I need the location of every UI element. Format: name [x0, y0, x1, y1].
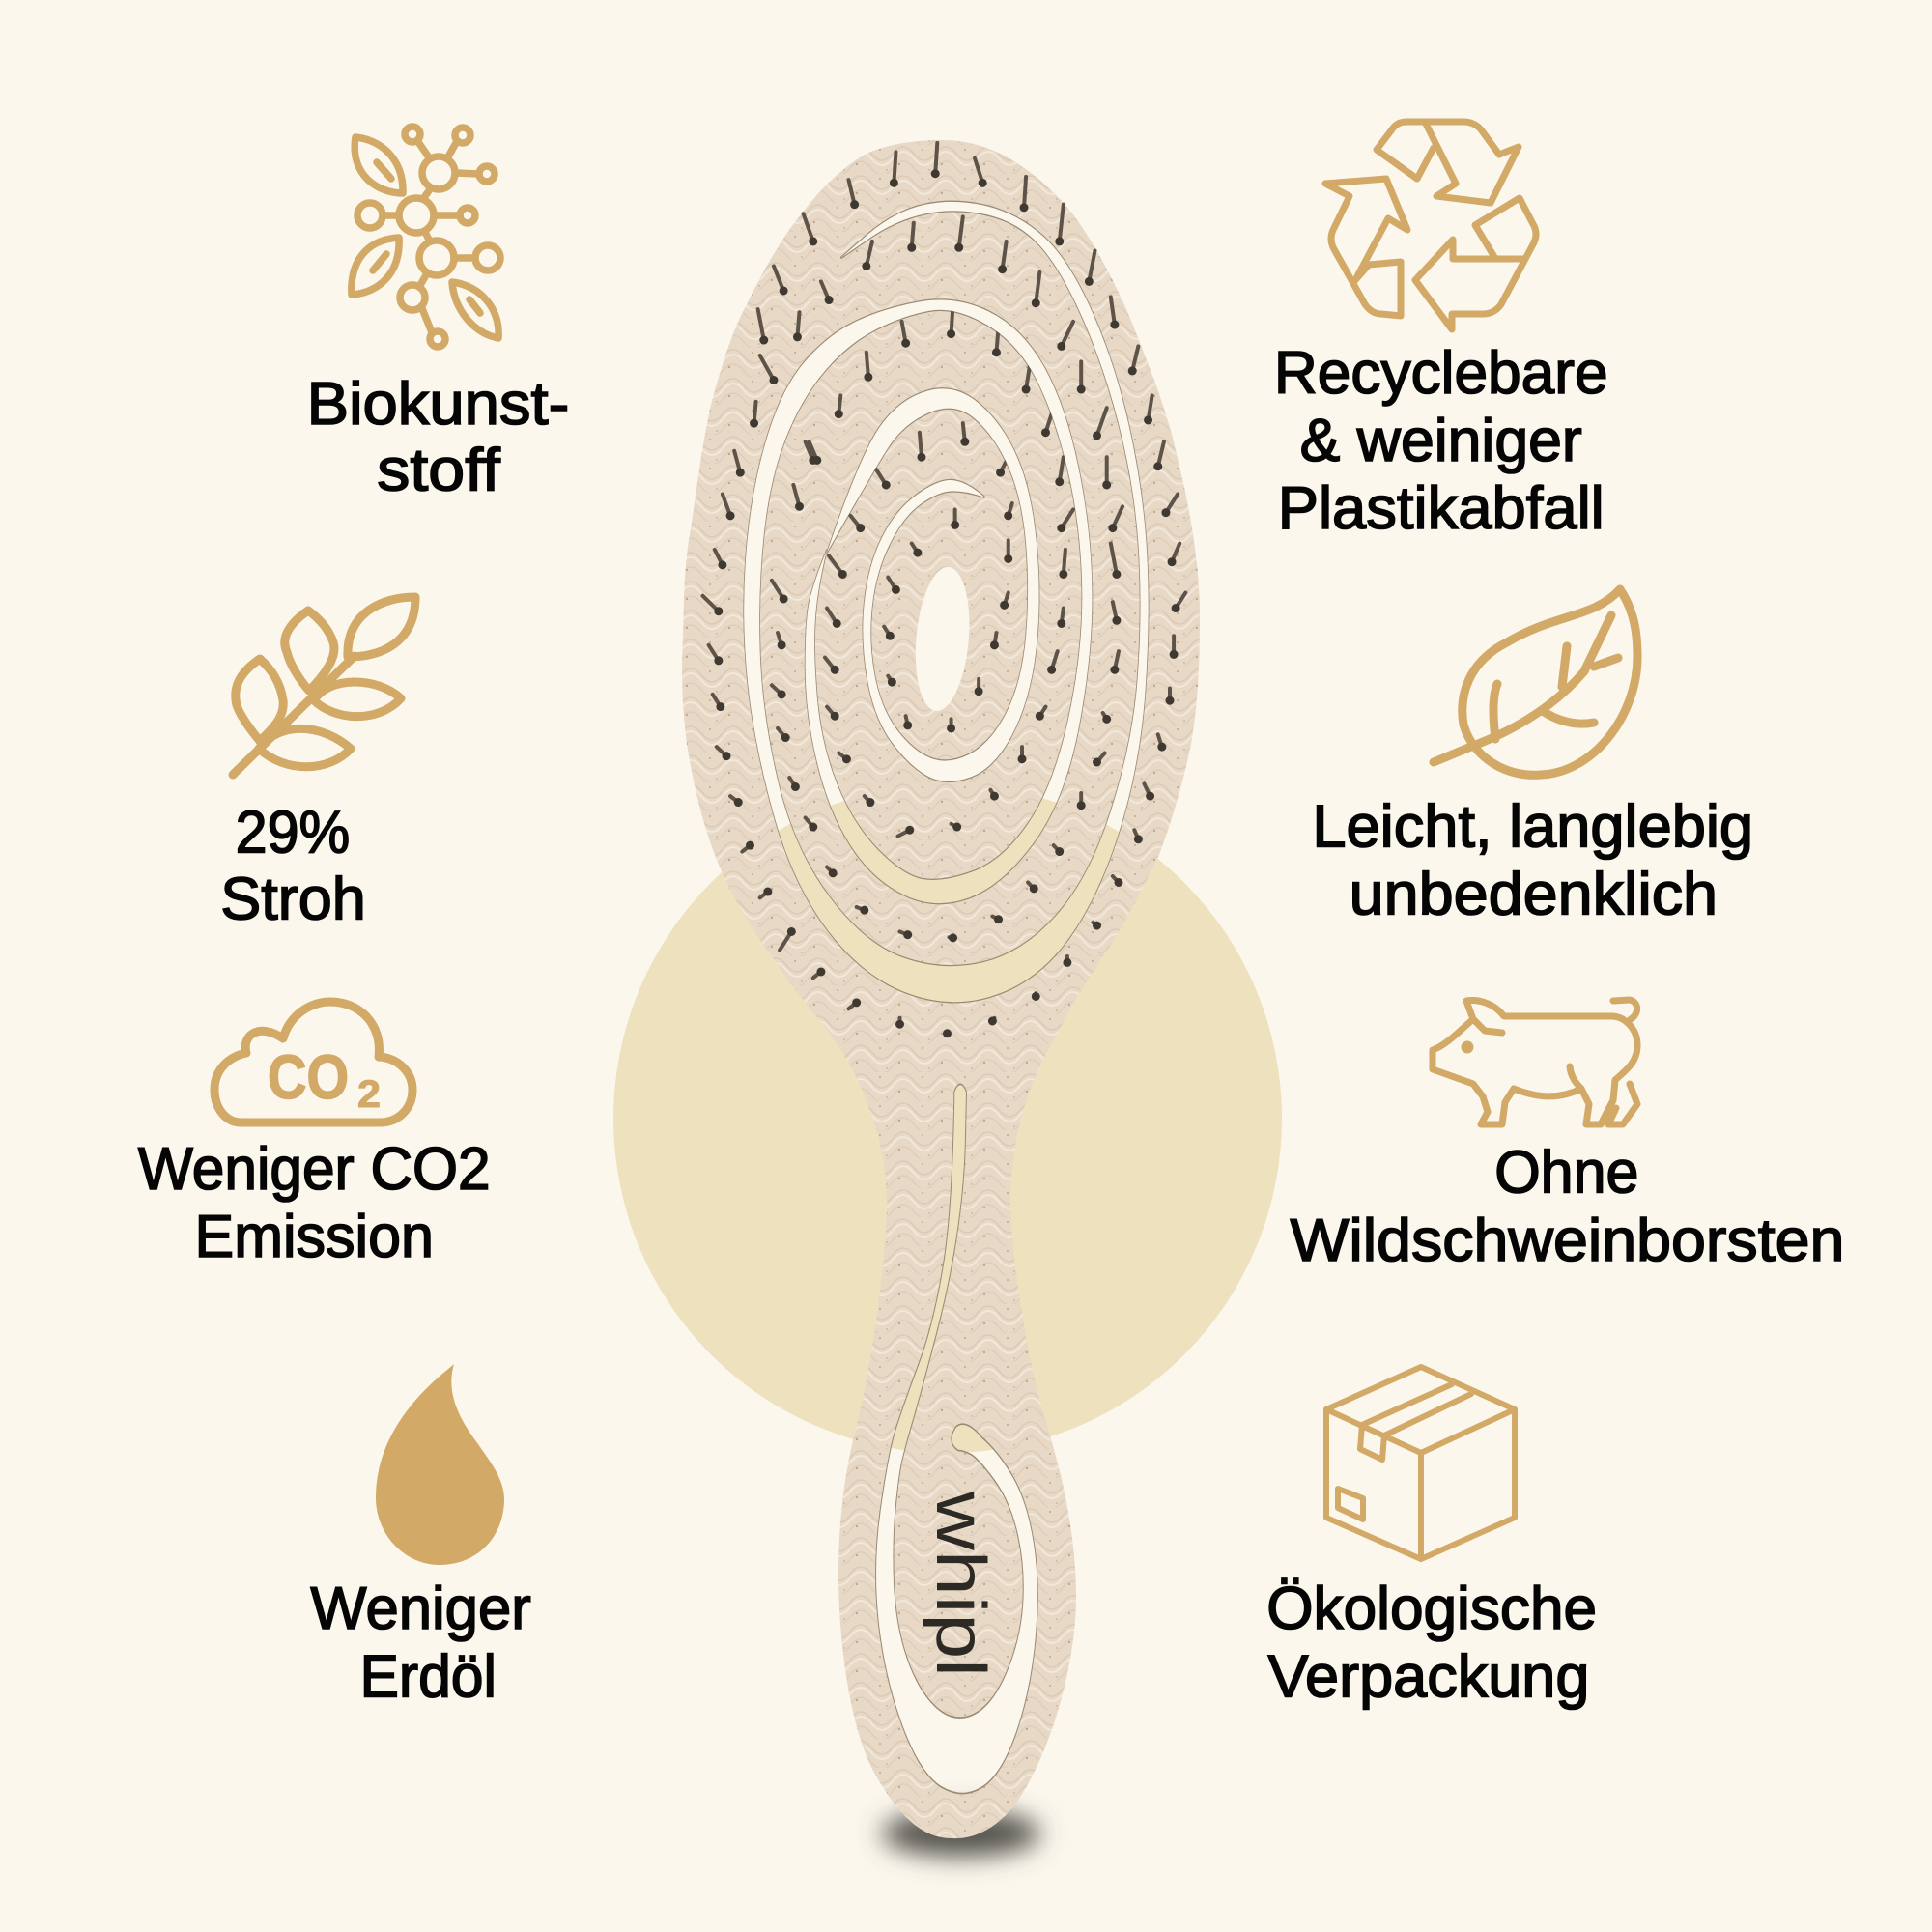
cut edges — [744, 202, 1149, 1793]
label: Weniger Erdöl — [310, 1576, 531, 1710]
label: Weniger Erdöl: Weniger — [310, 1576, 531, 1642]
label: Recyclebare — [1274, 340, 1608, 542]
icon: oil drop — [376, 1364, 504, 1565]
label: 29% Stroh: Stroh — [220, 867, 366, 933]
icon: recycling arrows — [1325, 122, 1536, 329]
label: Ökologische Verpackung — [1266, 1576, 1597, 1710]
icon: cardboard box — [1326, 1367, 1515, 1559]
label: 29% Stroh — [220, 800, 366, 933]
icon: CO2 cloud: 2 — [357, 1073, 381, 1116]
icon: leaf — [1434, 589, 1637, 775]
bristles — [703, 143, 1185, 1034]
label: Ohne Wildschweinborsten — [1290, 1140, 1844, 1274]
icon: pig — [1433, 1000, 1637, 1124]
icon: CO2 cloud — [214, 1002, 412, 1122]
label: Weniger CO2 Emission — [138, 1136, 491, 1270]
label: Ohne Wildschweinborsten: Wildschweinborsten — [1290, 1208, 1844, 1274]
brush logo: whipl — [922, 1491, 999, 1677]
label: Ökologische Verpackung: Verpackung — [1267, 1643, 1589, 1710]
label: Recyclebare: & weiniger — [1300, 408, 1582, 474]
label: Weniger CO2 Emission: Emission — [195, 1204, 434, 1270]
label: Weniger CO2 Emission: Weniger CO2 — [138, 1136, 491, 1203]
label: Leicht, langlebig — [1312, 793, 1753, 927]
label: Biokunststoff: Biokunst- — [307, 371, 569, 438]
label: Weniger Erdöl: Erdöl — [359, 1643, 497, 1710]
brush body — [682, 140, 1200, 1838]
brush product illustration — [682, 140, 1200, 1838]
label: Recyclebare: Recyclebare — [1274, 340, 1608, 407]
label: 29% Stroh: 29% — [236, 800, 350, 867]
label: Ökologische Verpackung: Ökologische — [1266, 1576, 1597, 1642]
icon: CO2 cloud: CO — [268, 1042, 349, 1112]
background circle — [613, 784, 1282, 1453]
label: Biokunststoff — [307, 371, 569, 504]
label: Leicht, langlebig: unbedenklich — [1350, 861, 1718, 927]
label: Recyclebare: Plastikabfall — [1278, 475, 1605, 542]
label: Ohne Wildschweinborsten: Ohne — [1494, 1140, 1638, 1207]
label: Leicht, langlebig: Leicht, langlebig — [1312, 793, 1753, 860]
label: Biokunststoff: stoff — [377, 438, 501, 504]
icon: biobased molecule — [352, 127, 500, 347]
brush shadow — [882, 1810, 1040, 1857]
icon: wheat — [233, 597, 415, 775]
